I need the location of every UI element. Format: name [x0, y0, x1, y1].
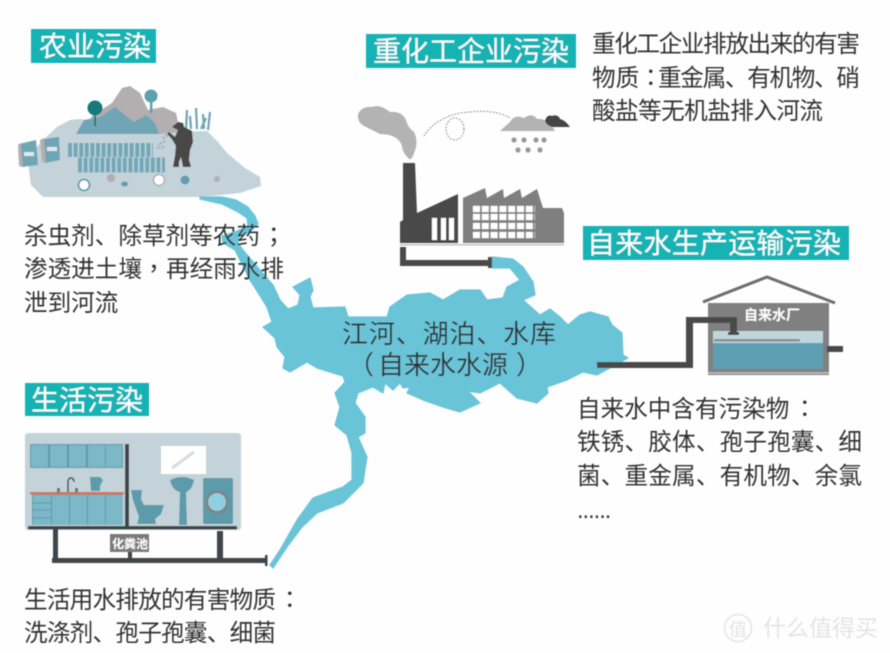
text: tap water description: 自来水中含有污染物 — [577, 396, 789, 423]
icon: factory discharge pipe — [400, 247, 492, 268]
heading: agricultural pollution: 农业污染 — [39, 31, 151, 62]
text: domestic description: ： — [278, 588, 302, 614]
icon: dashed vapour path — [424, 111, 510, 140]
river and lake — [200, 197, 628, 568]
text: tap water description: ： — [793, 397, 817, 423]
text: industry description: 重金属、有机物、硝 — [658, 65, 860, 92]
heading: heavy industry pollution: 重化工企业污染 — [373, 36, 569, 67]
lake label — [342, 319, 556, 380]
panel: agricultural pollution — [18, 29, 261, 197]
icon: water plant: 自来水厂 — [744, 307, 800, 323]
icon: plant inlet pipe — [597, 317, 739, 368]
text: industry description: 物质 — [592, 65, 639, 92]
text: tap water description — [577, 396, 862, 524]
heading: domestic pollution: 生活污染 — [31, 385, 143, 416]
lake label: （ — [348, 350, 374, 380]
illustration: kitchen and bathroom — [25, 433, 241, 530]
heading: tap water production pollution: 自来水生产运输污染 — [587, 228, 841, 259]
panel: tap water production and transport — [577, 226, 862, 524]
icon: farmer spraying — [156, 122, 193, 167]
text: agricultural description: 杀虫剂、除草剂等农药 — [24, 223, 260, 250]
text: domestic description: 洗涤剂、孢子孢囊、细菌 — [24, 620, 276, 647]
lake label: 江河、湖泊、水库 — [342, 319, 556, 349]
text: tap water description: 铁锈、胶体、孢子孢囊、细 — [577, 429, 862, 456]
text: industry description: ： — [639, 66, 663, 92]
text: agricultural description — [24, 223, 286, 317]
text: agricultural description: 渗透进土壤 — [24, 256, 142, 283]
text: tap water description: ...... — [577, 498, 610, 524]
panel: domestic pollution — [24, 383, 302, 647]
watermark: 什么值得买 — [763, 615, 878, 641]
text: industry description — [592, 31, 860, 125]
text: industry description: 酸盐等无机盐排入河流 — [592, 98, 823, 125]
icon: drainage pipes and septic tank: 化粪池 — [112, 536, 148, 551]
lake label: 自来水水源 — [378, 350, 508, 380]
text: agricultural description: 泄到河流 — [24, 290, 118, 317]
watermark: 值 — [729, 620, 747, 640]
icon: smoke — [358, 106, 416, 159]
text: industry description: 重化工企业排放出来的有害 — [592, 31, 860, 58]
icon: drainage pipes and septic tank — [28, 444, 268, 566]
icon: rain cloud — [500, 115, 570, 153]
text: agricultural description: ； — [262, 224, 286, 250]
text: agricultural description: ， — [142, 257, 166, 283]
text: domestic description: 生活用水排放的有害物质 — [24, 587, 276, 614]
text: tap water description: 菌、重金属、有机物、余氯 — [577, 463, 862, 490]
text: domestic description — [24, 587, 302, 647]
illustration: farm land — [18, 86, 261, 197]
icon: factory — [400, 163, 564, 246]
lake label: ） — [516, 350, 542, 380]
panel: heavy chemical industry — [358, 31, 860, 268]
text: agricultural description: 再经雨水排 — [166, 256, 284, 283]
icon: water plant — [703, 277, 843, 375]
